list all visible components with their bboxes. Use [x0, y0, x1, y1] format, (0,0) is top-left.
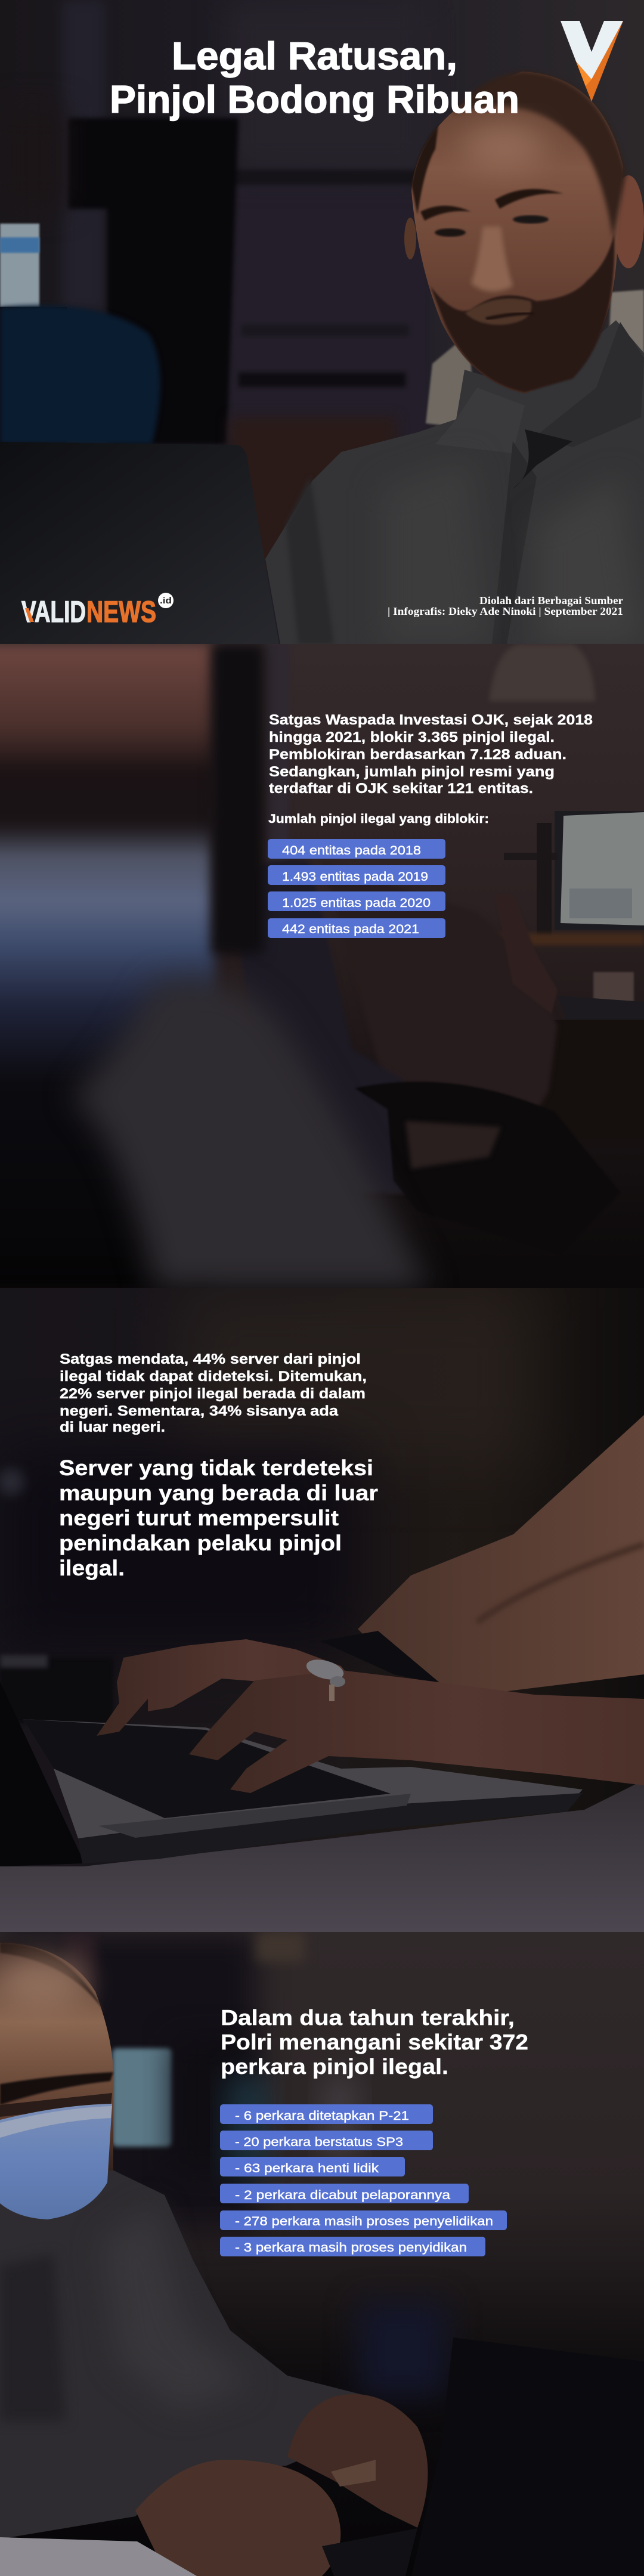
- source credit: Diolah dari Berbagai Sumber: [479, 595, 623, 606]
- title: Legal Ratusan,: [172, 34, 457, 78]
- photo element: monitor: [555, 811, 644, 930]
- photo: blurred masked figure and office: [0, 644, 644, 1288]
- list: blocked per year: 404 entitas pada 2018: [282, 844, 421, 857]
- subheading: blocked count: Jumlah pinjol ilegal yang diblokir:: [268, 812, 489, 826]
- list: case status: - 6 perkara ditetapkan P-21: [235, 2109, 409, 2123]
- text block: server stats: Satgas mendata, 44% server dari pinjol: [60, 1351, 361, 1367]
- panel: servers: [0, 1288, 644, 1932]
- photo element: laptop: [0, 442, 279, 644]
- photo element: face details: [420, 189, 564, 292]
- text block: server conclusion: [59, 1456, 378, 1580]
- list: case status: [220, 2104, 507, 2256]
- photo element: blurred foreground person: [0, 644, 429, 1288]
- title: [110, 34, 519, 121]
- list: case status: - 2 perkara dicabut pelaporannya: [235, 2188, 450, 2202]
- text block: server conclusion: Server yang tidak terdeteksi: [59, 1456, 373, 1480]
- source credit: [388, 595, 623, 617]
- text block: blocking summary: hingga 2021, blokir 3.365 pinjol ilegal.: [269, 729, 555, 745]
- logo: Validnews: .id: [160, 596, 172, 606]
- photo: hands on laptop: [0, 1288, 644, 1932]
- photo element: table: [0, 1780, 644, 1932]
- panel: police cases: [0, 1932, 644, 2576]
- heading: police cases: Dalam dua tahun terakhir,: [221, 2005, 515, 2030]
- text block: server stats: negeri. Sementara, 34% sisanya ada: [60, 1403, 339, 1419]
- panel: title cover: [0, 0, 644, 644]
- list: case status: - 278 perkara masih proses penyelidikan: [235, 2215, 493, 2228]
- text block: server conclusion: penindakan pelaku pinjol: [59, 1531, 342, 1555]
- text block: blocking summary: [269, 712, 593, 797]
- text block: server stats: ilegal tidak dapat dideteksi. Ditemukan,: [60, 1368, 367, 1385]
- title: Pinjol Bodong Ribuan: [110, 78, 519, 121]
- photo element: beard: [431, 233, 614, 392]
- icon: ring: [304, 1656, 346, 1701]
- photo element: head: [617, 175, 644, 268]
- list: case status: - 20 perkara berstatus SP3: [235, 2135, 403, 2149]
- icon: V logo: [561, 21, 623, 101]
- list: case status: - 3 perkara masih proses penyidikan: [235, 2241, 467, 2255]
- logo: Validnews: VALID: [21, 595, 86, 628]
- text block: blocking summary: Pemblokiran berdasarkan 7.128 aduan.: [269, 747, 566, 763]
- icon: face mask: [0, 2104, 112, 2219]
- text block: blocking summary: Sedangkan, jumlah pinjol resmi yang: [269, 764, 555, 780]
- text block: server conclusion: negeri turut mempersulit: [59, 1506, 339, 1530]
- text block: blocking summary: terdaftar di OJK sekitar 121 entitas.: [269, 781, 533, 797]
- photo element: head: [0, 1943, 113, 2171]
- source credit: | Infografis: Dieky Ade Ninoki | September 2021: [388, 605, 623, 617]
- photo: man at desk: [0, 0, 644, 644]
- list: blocked per year: [268, 839, 445, 938]
- photo element: seated person: [322, 862, 558, 1193]
- text block: server stats: di luar negeri.: [60, 1419, 165, 1435]
- list: blocked per year: 442 entitas pada 2021: [282, 922, 419, 936]
- photo element: sleeve: [358, 1415, 644, 1693]
- text block: blocking summary: Satgas Waspada Investasi OJK, sejak 2018: [269, 712, 593, 728]
- heading: police cases: Polri menangani sekitar 372: [221, 2030, 528, 2054]
- photo element: left hand: [97, 1639, 358, 1736]
- panel: blocked loans: [0, 644, 644, 1288]
- photo: masked man at laptop: [0, 1932, 644, 2576]
- text block: server stats: 22% server pinjol ilegal berada di dalam: [60, 1386, 366, 1402]
- text block: server conclusion: maupun yang berada di luar: [59, 1481, 378, 1505]
- photo element: shirt: [265, 320, 644, 644]
- heading: police cases: [221, 2005, 528, 2079]
- photo element: laptop: [411, 2337, 644, 2576]
- logo: Validnews: NEWS: [86, 595, 156, 628]
- logo: Validnews: [21, 593, 174, 628]
- photo element: shirt: [0, 2165, 370, 2539]
- text block: server conclusion: ilegal.: [59, 1556, 125, 1580]
- text block: server stats: [60, 1351, 367, 1435]
- list: blocked per year: 1.025 entitas pada 2020: [282, 896, 431, 910]
- list: case status: - 63 perkara henti lidik: [235, 2162, 379, 2175]
- heading: police cases: perkara pinjol ilegal.: [221, 2054, 448, 2079]
- photo element: right hand: [189, 1670, 644, 1793]
- photo element: blurred screen: [112, 2048, 172, 2147]
- list: blocked per year: 1.493 entitas pada 2019: [282, 870, 428, 884]
- photo element: laptop: [0, 1682, 583, 1866]
- photo element: hands: [287, 2394, 428, 2528]
